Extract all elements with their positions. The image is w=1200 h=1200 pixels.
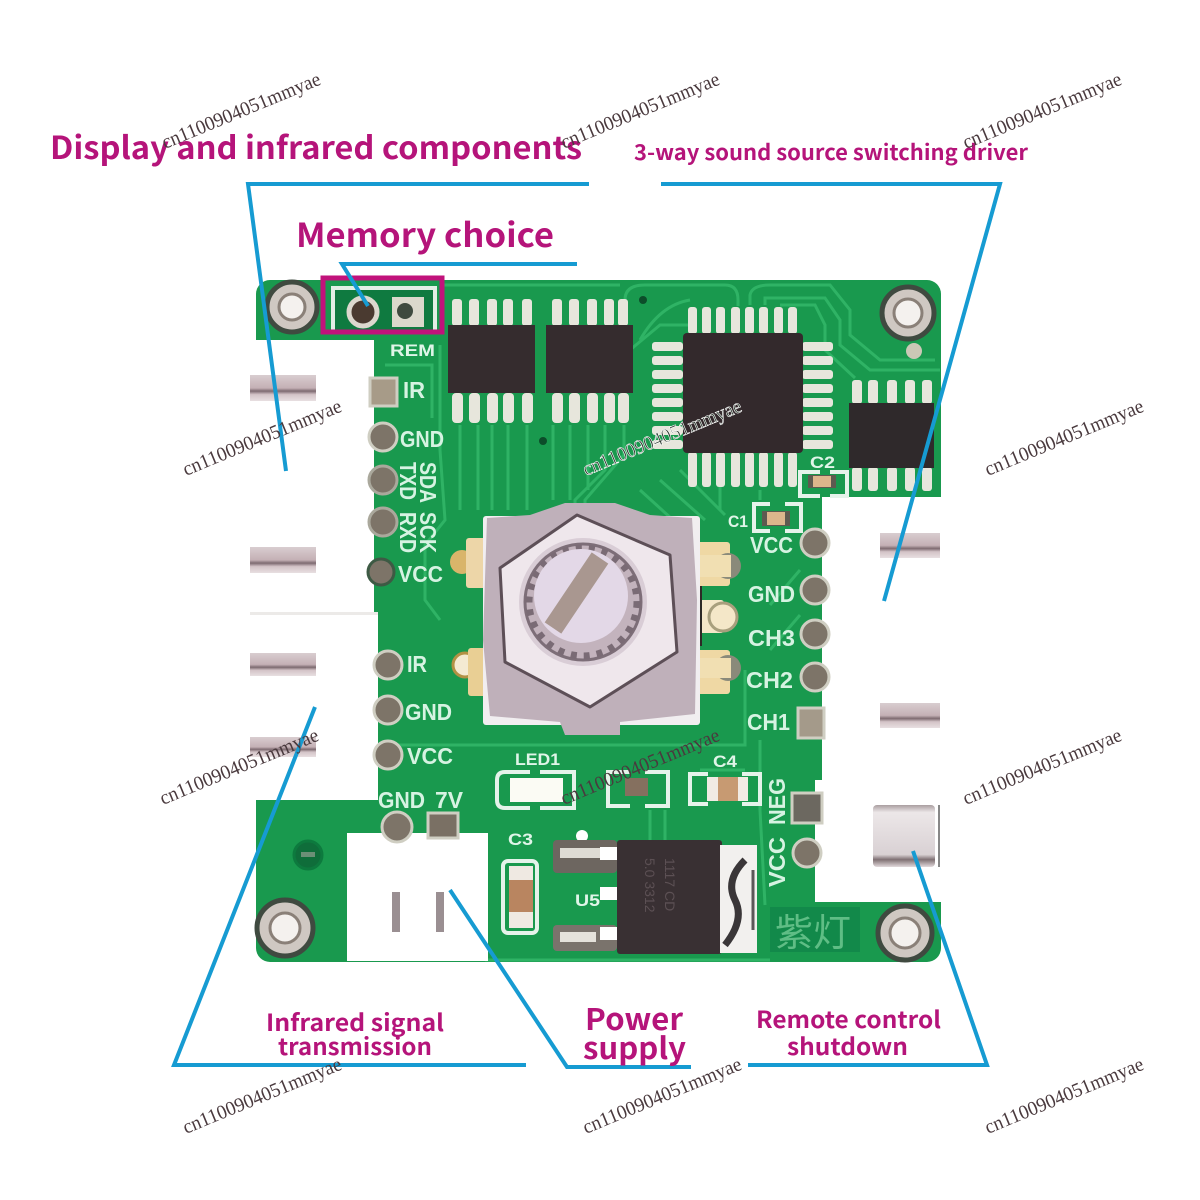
label: infrared signal transmission: Infrared signal — [266, 1004, 444, 1038]
watermarks: cn1100904051mmyae — [179, 1053, 345, 1139]
board pads — [368, 378, 829, 867]
chip body: main controller — [683, 333, 803, 453]
watermarks: cn1100904051mmyae — [959, 724, 1125, 810]
silkscreen labels: VCC — [407, 743, 453, 769]
leader lines — [174, 184, 1000, 1067]
watermarks: cn1100904051mmyae — [156, 724, 322, 810]
label: remote control shutdown: shutdown — [787, 1028, 908, 1062]
silkscreen labels: CH3 — [748, 625, 795, 651]
label: remote control shutdown: Remote control — [756, 1001, 941, 1035]
heading: 3-way sound source switching driver: 3-way sound source switching driver — [634, 136, 1029, 167]
silkscreen labels: CH2 — [746, 667, 793, 693]
silkscreen labels: GND — [400, 426, 444, 452]
silkscreen labels — [378, 341, 851, 957]
silkscreen labels: GND — [378, 787, 425, 813]
label: infrared signal transmission: transmission — [278, 1028, 432, 1062]
silkscreen labels: TXD — [395, 462, 421, 500]
label: power supply: Power — [585, 995, 684, 1039]
silkscreen labels: U5 — [575, 891, 600, 910]
silkscreen labels: RXD — [395, 512, 421, 553]
chip body: right — [849, 403, 934, 468]
label: remote control shutdown — [756, 1001, 941, 1062]
voltage regulator: 5.0 3312 — [642, 858, 658, 913]
label: power supply: supply — [583, 1024, 686, 1068]
rotary encoder — [450, 503, 741, 735]
chip body: middle — [546, 325, 633, 393]
silkscreen labels: C4 — [713, 752, 738, 771]
watermarks: cn1100904051mmyae — [579, 1053, 745, 1139]
connector: bottom power — [347, 833, 488, 961]
silkscreen labels: C3 — [508, 830, 533, 849]
watermarks: cn1100904051mmyae — [158, 68, 324, 154]
silkscreen labels: IR — [403, 377, 425, 403]
watermarks: cn1100904051mmyae — [959, 68, 1125, 154]
silkscreen labels: C1 — [728, 512, 748, 531]
label: power supply — [583, 995, 686, 1068]
memory choice jumper — [323, 278, 442, 332]
silkscreen labels: REM — [390, 341, 435, 360]
silkscreen labels: 7V — [435, 787, 464, 813]
silkscreen labels: VCC — [398, 561, 443, 587]
voltage regulator: 1117 CD — [662, 858, 678, 911]
encoder pads — [450, 538, 741, 696]
silkscreen labels: CH1 — [747, 709, 790, 735]
label: infrared signal transmission — [266, 1004, 444, 1062]
connector pins: left — [250, 375, 316, 757]
heading: display and infrared components: Display and infrared components — [50, 123, 582, 169]
silkscreen labels: LED1 — [515, 750, 560, 769]
silkscreen labels: C2 — [810, 453, 835, 472]
screws — [257, 282, 934, 960]
watermarks: cn1100904051mmyae — [557, 68, 723, 154]
silkscreen labels: GND — [405, 699, 452, 725]
silkscreen labels: IR — [407, 651, 427, 677]
silkscreen labels: SDA — [415, 462, 441, 503]
voltage regulator — [553, 840, 757, 954]
silkscreen labels: VCC — [764, 837, 790, 887]
silkscreen labels: GND — [748, 581, 795, 607]
silkscreen labels: NEG — [764, 778, 790, 825]
circuit board — [256, 280, 941, 962]
heading: memory choice: Memory choice — [296, 209, 554, 257]
watermarks — [156, 68, 1147, 1139]
chip body: left — [448, 325, 535, 393]
watermarks: cn1100904051mmyae — [179, 395, 345, 481]
small components — [497, 472, 847, 933]
watermarks: cn1100904051mmyae — [981, 395, 1147, 481]
chips — [448, 299, 934, 491]
silkscreen labels: VCC — [750, 532, 793, 558]
watermarks: cn1100904051mmyae — [557, 724, 723, 810]
chip pins — [452, 299, 932, 491]
connector: right driver header — [815, 497, 941, 902]
silkscreen labels: 紫灯 — [775, 902, 851, 957]
watermarks: cn1100904051mmyae — [981, 1053, 1147, 1139]
watermarks: cn1100904051mmyae — [579, 395, 745, 481]
connector: left display header — [250, 340, 378, 800]
silkscreen labels: SCK — [415, 512, 441, 553]
